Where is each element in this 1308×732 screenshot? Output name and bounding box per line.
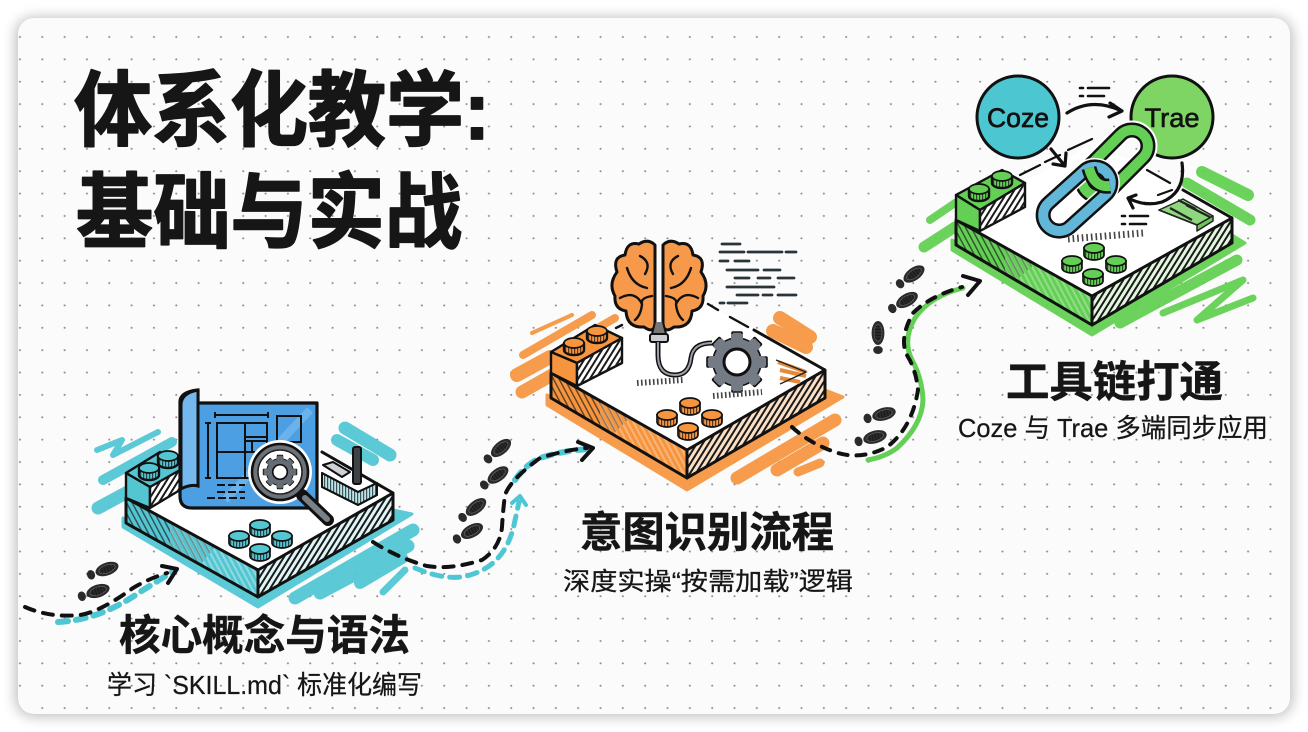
panel: 核心概念与语法 [97, 390, 422, 700]
panel: 工具链打通 [924, 76, 1268, 443]
heading: 意图识别流程 [580, 509, 834, 556]
brick [126, 451, 190, 508]
isometric platform [956, 139, 1232, 325]
icon: brain [612, 241, 706, 342]
wire from brain to gear [658, 342, 712, 375]
arrow: path into step one [25, 566, 177, 622]
icon: small tray [1159, 199, 1213, 231]
icon: four coins [1062, 243, 1126, 286]
icon: tray and pencil [322, 447, 377, 505]
sync arrows [1051, 88, 1183, 224]
title: 体系化教学: [74, 65, 490, 156]
icon: footprints [76, 262, 928, 604]
scribble shadows [637, 360, 806, 396]
title: 基础与实战 [76, 167, 462, 258]
isometric platform [551, 293, 825, 478]
arrow: path from step two to step three [792, 276, 980, 460]
icon: Trae circle [1131, 76, 1213, 158]
subtitle: Coze 与 Trae 多端同步应用 [958, 413, 1268, 443]
title [74, 65, 490, 258]
orange marker strokes [517, 315, 843, 490]
heading: 核心概念与语法 [119, 612, 410, 659]
green marker strokes [924, 172, 1253, 335]
icon: chain link [1037, 123, 1155, 238]
isometric platform [126, 421, 393, 597]
panel: 意图识别流程 [517, 241, 853, 596]
icon: Coze circle: Coze [987, 103, 1049, 133]
icon: magnifying glass [248, 440, 328, 520]
heading: 工具链打通 [1006, 359, 1223, 407]
icon: four coins [229, 520, 292, 561]
icon: Coze circle [977, 76, 1059, 158]
subtitle: 深度实操“按需加载”逻辑 [563, 568, 853, 596]
icon: gear [707, 332, 767, 392]
brick [551, 325, 622, 386]
scribble shadow [1068, 233, 1143, 239]
icon: four coins [657, 398, 722, 440]
icon: Trae circle: Trae [1144, 103, 1200, 133]
icon: blueprint [180, 390, 317, 508]
arrow: path from step one to step two [373, 442, 593, 577]
subtitle: 学习 `SKILL.md` 标准化编写 [107, 670, 422, 700]
brick [956, 170, 1025, 231]
teal marker strokes [97, 428, 413, 607]
note lines [720, 244, 796, 303]
